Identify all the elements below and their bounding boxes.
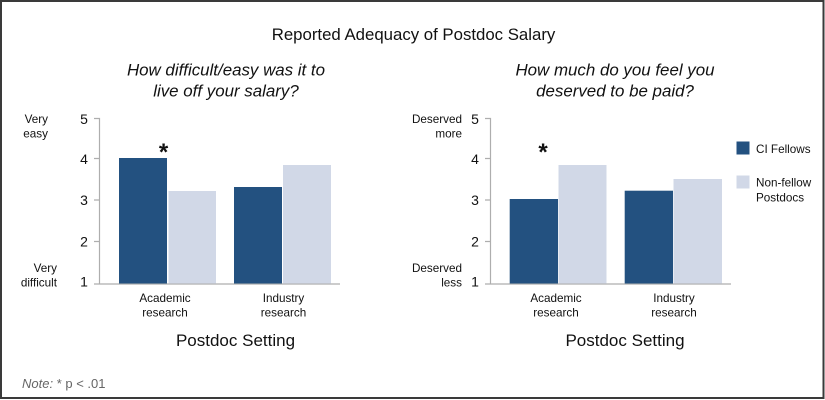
- category label: academic research: research: [533, 306, 579, 320]
- y axis numbers: 1: [471, 274, 479, 290]
- y axis numbers: [80, 111, 88, 290]
- y axis top label: Very: [25, 113, 48, 126]
- y axis top label: easy: [23, 128, 48, 140]
- y axis numbers: 3: [80, 192, 88, 208]
- question heading: deserved pay: How much do you feel you: [515, 60, 715, 80]
- legend label: CI Fellows: CI Fellows: [756, 143, 811, 156]
- y axis numbers: 5: [80, 111, 88, 127]
- question heading: difficult or easy: live off your salary?: [153, 82, 299, 100]
- panel: deserved pay chart: [412, 60, 731, 350]
- y axis with ticks: [94, 118, 340, 284]
- category label: industry research: Industry: [263, 292, 304, 305]
- y axis numbers: 2: [471, 234, 479, 250]
- significance asterisk: *: [538, 139, 548, 166]
- y axis numbers: 4: [471, 151, 479, 167]
- y axis numbers: 3: [471, 192, 479, 208]
- y axis numbers: [471, 111, 479, 290]
- bars: industry research: [625, 179, 722, 284]
- x axis title: Postdoc Setting: [176, 331, 295, 350]
- category label: industry research: research: [651, 306, 697, 320]
- legend label: Non-fellow Postdocs: Postdocs: [756, 192, 804, 204]
- bars: academic research: [119, 158, 216, 284]
- y axis with ticks: [485, 118, 731, 284]
- y axis numbers: 5: [471, 111, 479, 127]
- y axis numbers: 4: [80, 151, 88, 167]
- footnote: Note: * p < .01: [22, 376, 105, 391]
- y axis numbers: 1: [80, 274, 88, 290]
- y axis bottom label: Deserved: [412, 262, 462, 275]
- y axis bottom label: less: [441, 276, 462, 290]
- significance asterisk: *: [159, 139, 169, 166]
- title: Reported Adequacy of Postdoc Salary: [272, 25, 556, 44]
- y axis bottom label: difficult: [21, 276, 58, 290]
- y axis top label: more: [435, 128, 462, 140]
- category label: industry research: research: [261, 306, 306, 320]
- y axis bottom label: Very: [34, 262, 57, 275]
- bars: academic research: [510, 165, 606, 284]
- category label: academic research: research: [142, 306, 188, 320]
- question heading: difficult or easy: How difficult/easy was it to: [127, 60, 325, 80]
- category label: academic research: Academic: [139, 292, 191, 305]
- legend: [736, 142, 812, 204]
- y axis numbers: 2: [80, 234, 88, 250]
- y axis top label: Deserved: [412, 113, 462, 126]
- legend swatch: Non-fellow Postdocs: [736, 176, 750, 188]
- category label: academic research: Academic: [530, 292, 582, 305]
- legend label: Non-fellow Postdocs: Non-fellow: [756, 176, 812, 190]
- bars: industry research: [234, 165, 331, 284]
- question heading: deserved pay: deserved to be paid?: [536, 82, 694, 100]
- legend swatch: CI Fellows: [736, 142, 750, 154]
- category label: industry research: Industry: [653, 292, 695, 305]
- panel: living off salary chart: [21, 60, 340, 350]
- x axis title: Postdoc Setting: [565, 331, 685, 350]
